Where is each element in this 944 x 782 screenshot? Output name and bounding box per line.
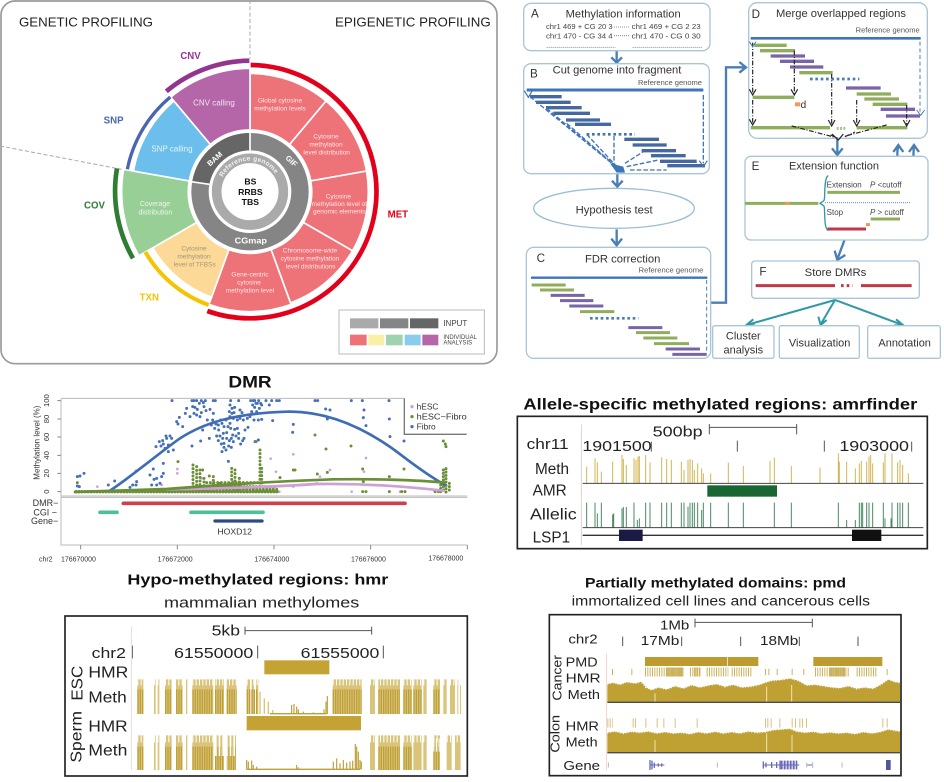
box A: methylation information: chr1 469 + CG 20 3	[546, 22, 613, 31]
track labels: AMR	[533, 483, 567, 500]
box F: store DMRs: F	[759, 265, 766, 278]
category labels: MET	[388, 209, 408, 220]
track labels: Meth	[88, 743, 127, 760]
box A: methylation information: chr1 470 - CG 34 4	[546, 31, 613, 40]
track labels: Meth	[88, 690, 127, 707]
annotation tracks: DMR−	[33, 498, 58, 508]
box D: merge overlapped regions: Reference genome	[856, 25, 920, 34]
segment labels: Cytosine	[181, 246, 207, 253]
chart legend	[404, 398, 467, 434]
title: DMR: DMR	[228, 372, 272, 391]
x axis labels: 176678000	[428, 555, 463, 562]
box A: methylation information: Methylation information	[566, 8, 681, 20]
chart legend: hESC−Fibro	[417, 412, 467, 422]
box A: methylation information	[524, 3, 710, 51]
category labels: CNV	[180, 51, 201, 62]
box: cluster analysis: Cluster	[726, 331, 761, 343]
box C: FDR correction: Reference genome	[639, 265, 703, 274]
track: genes	[608, 760, 891, 770]
segment labels: Gene-centric	[231, 272, 269, 279]
segment labels: level distributions	[286, 264, 336, 271]
legend: INDIVIDUAL	[443, 335, 478, 341]
legend	[339, 310, 484, 354]
track: Sperm Meth	[137, 738, 461, 769]
track labels: Sperm	[68, 711, 85, 763]
title: amrfinder: Allele-specific methylated regions: amrfinder	[523, 396, 917, 413]
track: ESC Meth	[137, 682, 461, 714]
box D: merge overlapped regions: D	[752, 8, 760, 21]
segment labels: methylation	[309, 142, 343, 149]
y axis labels: 20	[42, 469, 51, 478]
track: cancer PMD	[645, 657, 882, 666]
track labels: Colon	[547, 715, 562, 753]
box D: merge overlapped regions: Merge overlapped regions	[776, 8, 906, 20]
track labels: ESC	[70, 666, 87, 701]
box E: extension function	[745, 156, 928, 240]
y axis labels: 60	[42, 433, 51, 441]
hypothesis test oval	[534, 188, 694, 228]
box B: cut genome into fragment: B	[530, 68, 538, 81]
scale and coordinates: 500bp	[653, 424, 703, 441]
scale and coordinates: 61555000	[301, 646, 379, 662]
scale and coordinates: 1901500	[582, 438, 652, 455]
box E: extension function: P <cutoff	[870, 180, 902, 189]
track labels: Gene	[563, 758, 600, 773]
x axis labels: 176674000	[254, 556, 289, 563]
title: hmr: Hypo-methylated regions: hmr	[127, 571, 389, 588]
title: pmd: Partially methylated domains: pmd	[585, 575, 846, 590]
ring labels: CGmap	[235, 236, 267, 246]
wheel segments	[98, 46, 384, 331]
segment labels: Global cytosine	[258, 98, 303, 105]
scale and coordinates	[92, 624, 383, 770]
panel: hypo-methylated regions	[65, 571, 467, 776]
scale and coordinates: chr11	[527, 436, 569, 453]
box D: merge overlapped regions	[749, 3, 927, 140]
box: visualization	[779, 326, 859, 358]
x axis labels: 176676000	[351, 556, 386, 563]
ring labels: Reference genome	[219, 157, 278, 177]
scale and coordinates: 1Mb	[660, 617, 689, 632]
box: visualization: Visualization	[789, 338, 850, 350]
box A: methylation information: A	[531, 7, 539, 20]
scale and coordinates	[568, 617, 858, 770]
box D: merge overlapped regions: d	[801, 100, 806, 111]
track labels: HMR	[88, 664, 128, 681]
scale and coordinates: chr2	[92, 646, 126, 662]
track labels	[530, 461, 577, 547]
segment labels: Chromosome-wide	[283, 247, 338, 254]
browser frame	[549, 615, 901, 776]
ring labels: BAM	[205, 150, 224, 168]
subtitle: immortalized cell lines and cancerous cells	[572, 593, 870, 608]
segment labels: Cytosine	[326, 194, 351, 201]
annotation tracks	[31, 498, 405, 537]
heading: genetic profiling: GENETIC PROFILING	[19, 14, 153, 29]
y axis labels: 80	[42, 415, 51, 423]
category labels	[84, 51, 408, 304]
track: ESC HMR	[264, 660, 329, 674]
track: meth	[583, 453, 923, 483]
track labels	[68, 664, 128, 763]
scale and coordinates	[527, 424, 912, 545]
segment labels: distribution	[138, 210, 172, 217]
chart legend: Fibro	[417, 422, 436, 432]
center protocols: TBS	[242, 197, 259, 207]
segment labels: methylation level	[226, 288, 274, 295]
track labels: LSP1	[533, 530, 570, 547]
legend: ANALYSIS	[443, 341, 472, 347]
box A: methylation information: chr1 469 + CG 2 23	[632, 22, 701, 31]
box E: extension function: Extension function	[789, 161, 879, 173]
track labels: Cancer	[549, 654, 564, 701]
box E: extension function: E	[752, 160, 760, 173]
center protocols: RRBS	[238, 187, 263, 197]
panel: allele-specific methylated regions	[517, 396, 927, 549]
segment labels: cytosine methylation	[281, 256, 340, 263]
x axis labels: 176672000	[158, 556, 193, 563]
track labels: HMR	[566, 718, 599, 733]
category labels: TXN	[140, 293, 159, 304]
track: colon HMR	[607, 709, 888, 737]
box C: FDR correction: C	[537, 252, 545, 265]
ring labels	[205, 150, 299, 246]
scale and coordinates: 5kb	[212, 624, 240, 640]
subtitle: mammalian methylomes	[164, 595, 359, 612]
input rings	[189, 132, 300, 242]
browser frame	[517, 416, 927, 549]
segment labels: Cytosine	[313, 134, 339, 141]
scale and coordinates: 1903000	[839, 438, 909, 455]
box: cluster analysis: analysis	[723, 344, 764, 356]
segment labels: level distribution	[303, 150, 350, 157]
track labels: Allelic	[530, 506, 577, 523]
box C: FDR correction: FDR correction	[585, 253, 660, 265]
track labels: Meth	[568, 687, 600, 702]
x axis labels: chr2	[39, 556, 53, 563]
teal output arrows	[746, 300, 903, 325]
box A: methylation information: chr1 470 - CG 0 30	[632, 31, 701, 40]
panel: DMR detection flowchart	[524, 3, 940, 358]
ring labels: GIF	[284, 153, 299, 169]
hypothesis test oval: Hypothesis test	[576, 204, 653, 216]
box: cluster analysis	[713, 326, 774, 358]
track: allelic	[583, 503, 923, 528]
panel: DMR methylation chart	[31, 372, 467, 563]
box B: cut genome into fragment: Reference genome	[638, 78, 702, 87]
y axis labels: 40	[42, 451, 51, 460]
segment labels: cytosine	[237, 280, 261, 287]
segment labels: level of TFBSs	[174, 262, 216, 269]
y axis labels: Methylation level (%)	[32, 405, 41, 480]
x axis labels: 176670000	[61, 556, 96, 563]
segment labels	[138, 98, 367, 295]
track: Sperm HMR	[247, 716, 361, 730]
scale and coordinates: 61550000	[174, 646, 253, 662]
panel: partially methylated domains	[547, 575, 901, 776]
x axis labels	[39, 555, 463, 563]
box E: extension function: Stop	[827, 208, 844, 217]
chart axes	[57, 398, 467, 549]
connector arrows	[611, 51, 919, 303]
trend curves	[75, 412, 445, 492]
box E: extension function: P > cutoff	[870, 208, 905, 217]
chart legend: hESC	[417, 402, 438, 412]
segment labels: CNV calling	[193, 99, 235, 108]
box C: FDR correction	[526, 247, 711, 358]
outer category arcs	[115, 61, 376, 318]
category labels: SNP	[104, 116, 124, 127]
annotation tracks: HOXD12	[217, 527, 252, 537]
track labels: Meth	[566, 735, 598, 750]
segment labels: methylation	[177, 254, 211, 261]
scatter: hESC-Fibro points	[76, 435, 449, 493]
scale and coordinates: chr2	[568, 631, 598, 646]
box B: cut genome into fragment: Cut genome into fragment	[553, 64, 681, 76]
segment labels: methylation levels	[254, 106, 307, 113]
track labels: HMR	[566, 670, 601, 685]
y axis labels: 0	[42, 490, 51, 494]
scale and coordinates: 18Mb	[760, 633, 798, 648]
segment labels: SNP calling	[151, 144, 193, 153]
box: annotation	[868, 326, 940, 358]
track: LSP1 gene	[583, 530, 923, 541]
browser frame	[65, 616, 467, 776]
scatter: Fibro points	[77, 401, 404, 487]
y axis labels	[32, 394, 51, 494]
center protocols: BS	[244, 177, 257, 187]
panel: genetic and epigenetic profiling wheel	[0, 0, 498, 364]
box F: store DMRs	[752, 261, 919, 298]
annotation tracks: Gene−	[31, 516, 58, 526]
track: cancer HMR	[612, 662, 888, 681]
track labels: Meth	[535, 461, 569, 478]
box F: store DMRs: Store DMRs	[805, 267, 866, 279]
box B: cut genome into fragment	[524, 64, 709, 174]
box: annotation: Annotation	[878, 338, 931, 350]
category labels: COV	[84, 200, 105, 211]
annotation tracks: CGI −	[33, 507, 57, 517]
segment labels: genomic elements	[313, 209, 366, 216]
center protocols	[238, 177, 263, 207]
track labels	[547, 654, 601, 773]
track: colon Meth	[607, 728, 900, 753]
box E: extension function: Extension	[827, 180, 862, 189]
track: AMR	[707, 485, 777, 497]
segment labels: methylation level of	[312, 201, 367, 208]
scatter: hESC points	[97, 454, 400, 492]
scale and coordinates: 17Mb	[641, 633, 679, 648]
track labels: PMD	[566, 655, 598, 670]
segment labels: Coverage	[140, 201, 170, 208]
y axis labels: 100	[42, 394, 51, 407]
legend: INPUT	[443, 319, 467, 328]
heading: epigenetic profiling: EPIGENETIC PROFILING	[335, 14, 491, 29]
track: cancer Meth	[607, 678, 900, 702]
track labels: HMR	[88, 718, 128, 735]
